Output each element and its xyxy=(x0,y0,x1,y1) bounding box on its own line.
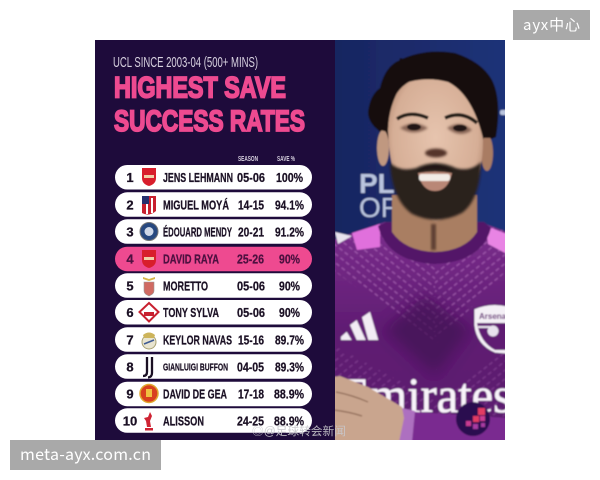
row 7: Keylor Navas xyxy=(115,327,312,352)
row 9: David De Gea: 17-18 xyxy=(238,387,264,402)
label box: top right: ayx中心 xyxy=(523,14,580,35)
sleeve and cuff xyxy=(398,408,507,442)
row 4: David Raya highlighted: 25-26 xyxy=(237,252,264,267)
backdrop lettering xyxy=(359,110,508,223)
row 1: Jens Lehmann xyxy=(115,165,312,190)
Arsenal crest xyxy=(474,305,508,354)
row 10: Alisson: 10 xyxy=(123,413,137,428)
hair back xyxy=(368,52,498,142)
eye shadows xyxy=(400,124,472,134)
backdrop lettering: OF xyxy=(359,192,398,223)
title: HIGHEST SAVE xyxy=(114,72,286,104)
panel: statistics table background xyxy=(95,40,335,440)
row 1: Jens Lehmann: JENS LEHMANN xyxy=(163,170,233,185)
row 5: Moretto: MORETTO xyxy=(163,278,208,293)
adidas stripes xyxy=(341,312,378,340)
row 10: Alisson: 88.9% xyxy=(274,413,304,428)
jersey darker chevron xyxy=(385,295,470,375)
title xyxy=(114,72,305,138)
row 4: David Raya highlighted xyxy=(115,247,312,271)
moustache xyxy=(420,166,450,170)
row 7: Keylor Navas: 15-16 xyxy=(238,332,264,348)
label box: bottom left: meta-ayx.com.cn xyxy=(20,441,151,465)
row 2: Miguel Moyá xyxy=(115,192,312,217)
row 8: Gianluigi Buffon xyxy=(115,354,312,379)
row 8: Gianluigi Buffon: GIANLUIGI BUFFON xyxy=(163,362,228,374)
row 5: Moretto xyxy=(115,273,312,298)
row 8: Gianluigi Buffon: 8 xyxy=(126,359,134,374)
row 6: Tony Sylva xyxy=(115,300,312,324)
row 2: Miguel Moyá: 14-15 xyxy=(238,198,264,212)
row 1: Jens Lehmann: 1 xyxy=(126,170,134,185)
row 8: Gianluigi Buffon: 89.3% xyxy=(275,359,304,374)
mouth xyxy=(418,172,452,191)
row 2: Miguel Moyá: 2 xyxy=(126,198,134,212)
panel: player photo xyxy=(333,38,512,442)
row 5: Moretto: 90% xyxy=(279,278,300,293)
jersey pink shoulders xyxy=(352,224,380,250)
jersey xyxy=(335,221,505,418)
row 3: Édouard Mendy: 3 xyxy=(126,224,134,239)
row 8: Gianluigi Buffon: 04-05 xyxy=(237,359,264,374)
row 9: David De Gea: DAVID DE GEA xyxy=(163,387,227,402)
sponsor text: Emirates xyxy=(340,367,512,423)
hand xyxy=(333,376,404,442)
row 10: Alisson: ALISSON xyxy=(163,413,204,428)
row 4: David Raya highlighted: 4 xyxy=(126,252,134,267)
hair fringe xyxy=(380,58,494,138)
row 9: David De Gea: 9 xyxy=(126,387,134,402)
neck and collar xyxy=(378,195,491,264)
title: SUCCESS RATES xyxy=(114,105,305,138)
row 9: David De Gea: 88.9% xyxy=(274,387,304,402)
row 6: Tony Sylva: TONY SYLVA xyxy=(163,305,219,320)
row 3: Édouard Mendy: 20-21 xyxy=(238,224,264,239)
row 6: Tony Sylva: 90% xyxy=(279,305,300,320)
row 5: Moretto: 5 xyxy=(126,278,134,293)
logo badge xyxy=(456,402,490,436)
row 3: Édouard Mendy: 91.2% xyxy=(275,224,304,239)
row 4: David Raya highlighted: DAVID RAYA xyxy=(163,252,219,267)
row 1: Jens Lehmann: 100% xyxy=(276,170,303,185)
row 5: Moretto: 05-06 xyxy=(237,278,265,293)
row 3: Édouard Mendy xyxy=(115,219,312,244)
ranking table xyxy=(115,165,312,433)
row 2: Miguel Moyá: 94.1% xyxy=(275,198,304,212)
row 6: Tony Sylva: 6 xyxy=(126,305,134,320)
face xyxy=(377,58,494,222)
row 9: David De Gea xyxy=(115,382,312,406)
row 3: Édouard Mendy: ÉDOUARD MENDY xyxy=(163,224,232,239)
nose xyxy=(425,148,447,158)
row 2: Miguel Moyá: MIGUEL MOYÁ xyxy=(163,198,229,212)
column headers: SEASON xyxy=(238,156,258,163)
subtitle: UCL SINCE 2003-04 (500+ MINS) xyxy=(113,54,258,71)
eyes xyxy=(407,124,421,130)
backdrop lettering: PL xyxy=(359,168,395,199)
row 7: Keylor Navas: 7 xyxy=(126,332,134,348)
beard xyxy=(390,162,481,220)
watermark: social handle: ◎@足球转会新闻 xyxy=(252,424,346,438)
column headers: SAVE % xyxy=(277,156,296,163)
row 4: David Raya highlighted: 90% xyxy=(279,252,300,267)
eyebrows xyxy=(397,114,477,123)
label box: bottom left xyxy=(10,440,161,470)
row 7: Keylor Navas: 89.7% xyxy=(275,332,304,348)
row 6: Tony Sylva: 05-06 xyxy=(237,305,265,320)
photo backdrop xyxy=(335,40,505,240)
Arsenal crest: Arsenal xyxy=(479,312,508,321)
row 1: Jens Lehmann: 05-06 xyxy=(237,170,265,185)
row 7: Keylor Navas: KEYLOR NAVAS xyxy=(163,332,232,348)
row 10: Alisson xyxy=(115,408,312,433)
label box: top right xyxy=(513,10,590,40)
row 10: Alisson: 24-25 xyxy=(237,413,264,428)
column headers xyxy=(238,156,296,163)
